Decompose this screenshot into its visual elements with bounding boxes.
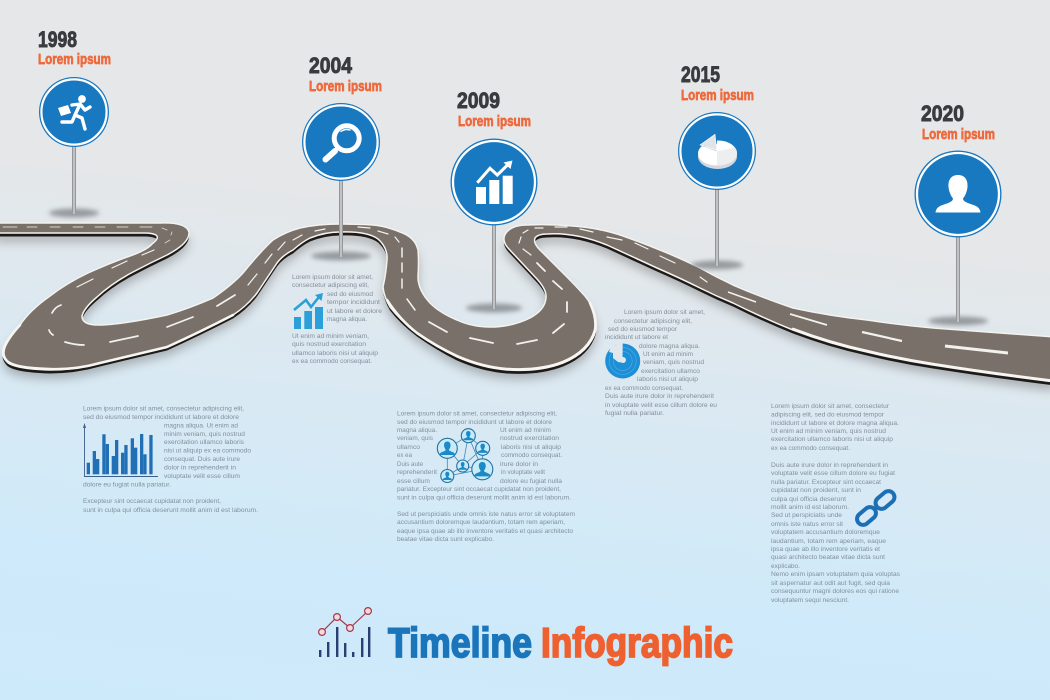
text block 2020: explicabo. xyxy=(771,563,800,570)
text block left: Lorem ipsum dolor sit amet, consectetur adipiscing elit, xyxy=(83,406,244,412)
year label 2004: 2004 xyxy=(309,53,353,78)
icon: growth chart xyxy=(294,293,323,329)
text block 2020: laudantium, totam rem aperiam, eaque xyxy=(771,538,886,545)
text block 2015 xyxy=(605,309,717,417)
milestone 2009 xyxy=(450,88,538,312)
text block left xyxy=(83,406,258,514)
sign post 2009 xyxy=(450,138,538,312)
text block left: voluptate velit esse cillum xyxy=(164,473,241,480)
year label 2020: 2020 xyxy=(921,101,964,126)
text block centre: commodo consequat. xyxy=(501,452,562,459)
icon: 3D pie xyxy=(698,134,737,169)
text block 2020: adipiscing elit, sed do eiusmod tempor xyxy=(771,412,885,418)
text block centre: sed do eiusmod tempor incididunt ut labore et dolore xyxy=(397,419,552,426)
text block left: minim veniam, quis nostrud xyxy=(164,431,245,438)
text block left: Excepteur sint occaecat cupidatat non proident, xyxy=(83,498,221,505)
text block 2004 xyxy=(292,274,382,365)
text block 2020: exercitation ullamco laboris nisi ut aliquip xyxy=(771,436,893,443)
text block 2020: Sed ut perspiciatis unde xyxy=(771,512,842,519)
text block 2004: consectetur adipiscing elit, xyxy=(292,282,369,289)
sign post 2015 xyxy=(678,112,756,270)
text block 2004: ex ea commodo consequat. xyxy=(292,358,372,365)
text block centre xyxy=(397,410,576,543)
text block centre: Sed ut perspiciatis unde omnis iste natus error sit voluptatem xyxy=(397,511,576,518)
text block 2015: Lorem ipsum dolor sit amet, xyxy=(624,309,705,316)
text block left: dolore eu fugiat nulla pariatur. xyxy=(83,482,171,489)
text block 2015: veniam, quis nostrud xyxy=(643,359,704,366)
text block 2004: Ut enim ad minim veniam, xyxy=(292,333,369,340)
year label 1998: 1998 xyxy=(38,27,77,52)
text block 2015: Ut enim ad minim xyxy=(643,351,693,358)
icon: runner xyxy=(58,95,90,129)
text block centre: Duis aute xyxy=(397,461,423,468)
text block 2020: ex ea commodo consequat. xyxy=(771,445,850,452)
text block centre: eaque ipsa quae ab illo inventore veritatis et quasi architecto xyxy=(397,528,573,535)
text block centre: pariatur. Excepteur sint occaecat cupidatat non proident, xyxy=(397,486,561,493)
text block 2020: mollit anim id est laborum. xyxy=(771,504,849,511)
text block 2015: ex ea commodo consequat. xyxy=(605,385,683,392)
text block 2004: sed do eiusmod xyxy=(327,291,373,298)
text block left: exercitation ullamco laboris xyxy=(164,439,245,446)
text block 2020 xyxy=(771,403,901,604)
subtitle 2009: Lorem ipsum xyxy=(458,114,531,130)
text block 2020: ipsa quae ab illo inventore veritatis et xyxy=(771,546,880,553)
text block 2020: Duis aute irure dolor in reprehenderit in xyxy=(771,462,888,469)
text block centre: ex ea xyxy=(397,452,412,459)
text block left: sed do eiusmod tempor incididunt ut labore et dolore xyxy=(83,414,239,421)
text block 2020: omnis iste natus error sit xyxy=(771,521,843,528)
text block left: consequat. Duis aute irure xyxy=(164,456,240,463)
text block 2004: ullamco laboris nisi ut aliquip xyxy=(292,350,378,357)
footer title xyxy=(319,608,733,666)
text block centre: Lorem ipsum dolor sit amet, consectetur adipiscing elit, xyxy=(397,410,557,418)
text block centre: Ut enim ad minim xyxy=(500,427,551,434)
subtitle 1998: Lorem ipsum xyxy=(38,52,111,68)
text block 2015: in voluptate velit esse cillum dolore eu xyxy=(605,402,717,409)
icon: magnifier xyxy=(326,126,359,160)
text block 2004: ut labore et dolore xyxy=(327,308,382,315)
year label 2009: 2009 xyxy=(457,88,500,113)
text block 2020: voluptatem accusantium doloremque xyxy=(771,529,880,536)
text block 2020: Nemo enim ipsam voluptatem quia voluptas xyxy=(771,571,901,578)
milestone 2004 xyxy=(302,53,382,260)
text block centre: reprehenderit xyxy=(397,469,437,476)
text block centre: irure dolor in xyxy=(500,461,538,468)
text block 2020: voluptate velit esse cillum dolore eu fugiat xyxy=(771,470,895,477)
text block centre: magna aliqua. xyxy=(397,427,437,434)
text block 2015: sed do eiusmod tempor xyxy=(608,326,678,333)
sign post 1998 xyxy=(39,77,109,218)
text block centre: veniam, quis xyxy=(397,435,434,442)
icon: rising bars xyxy=(476,160,513,204)
text block 2020: consequuntur magni dolores eos qui ratione xyxy=(771,588,899,595)
milestone 2015 xyxy=(678,62,756,270)
text block centre: accusantium doloremque laudantium, totam rem aperiam, xyxy=(397,519,565,526)
text block 2004: magna aliqua. xyxy=(327,316,367,323)
text block 2020: sit aspernatur aut odit aut fugit, sed quia xyxy=(771,580,890,587)
subtitle 2020: Lorem ipsum xyxy=(922,127,995,143)
text block 2020: quasi architecto beatae vitae dicta sunt xyxy=(771,554,885,561)
icon: chart logo xyxy=(319,608,371,657)
text block 2020: Lorem ipsum dolor sit amet, consectetur xyxy=(771,403,890,410)
text block left: sunt in culpa qui officia deserunt mollit anim id est laborum. xyxy=(83,507,258,514)
text block 2015: Duis aute irure dolor in reprehenderit xyxy=(605,393,714,400)
text block centre: laboris nisi ut aliquip xyxy=(501,444,561,451)
text block 2015: consectetur adipiscing elit, xyxy=(614,318,692,325)
icon: person xyxy=(936,175,980,212)
text block left: nisi ut aliquip ex ea commodo xyxy=(164,448,251,455)
text block centre: dolore eu fugiat nulla xyxy=(500,478,562,485)
text block centre: nostrud exercitation xyxy=(500,435,559,442)
subtitle 2004: Lorem ipsum xyxy=(309,79,382,95)
milestone 2020 xyxy=(914,101,1002,326)
text block 2020: nulla pariatur. Excepteur sint occaecat xyxy=(771,479,881,486)
text block centre: in voluptate velit xyxy=(501,469,545,476)
text block 2020: voluptatem sequi nesciunt. xyxy=(771,597,849,604)
year label 2015: 2015 xyxy=(681,62,720,87)
icon: people network xyxy=(437,429,493,482)
text block centre: sunt in culpa qui officia deserunt mollit anim id est laborum. xyxy=(397,494,571,502)
text block 2015: fugiat nulla pariatur. xyxy=(605,410,664,417)
text block left: magna aliqua. Ut enim ad xyxy=(164,422,238,429)
text block 2004: tempor incididunt xyxy=(327,299,380,306)
road xyxy=(0,223,1050,391)
title: Infographic: Infographic xyxy=(541,619,733,666)
text block 2004: Lorem ipsum dolor sit amet, xyxy=(292,274,373,281)
text block 2020: cupidatat non proident, sunt in xyxy=(771,487,861,494)
text block centre: beatae vitae dicta sunt explicabo. xyxy=(397,536,494,543)
text block centre: esse cillum xyxy=(397,478,430,485)
icon: segmented target xyxy=(605,342,640,378)
text block 2015: exercitation ullamco xyxy=(641,368,700,375)
sign post 2020 xyxy=(914,150,1002,326)
road centre dashes xyxy=(3,227,1008,353)
text block 2020: culpa qui officia deserunt xyxy=(771,496,846,503)
icon: chain link xyxy=(855,489,897,527)
sign post 2004 xyxy=(302,103,380,260)
text block 2020: Ut enim ad minim veniam, quis nostrud xyxy=(771,428,886,435)
text block 2015: laboris nisi ut aliquip xyxy=(637,376,698,383)
text block 2004: quis nostrud exercitation xyxy=(292,341,366,348)
icon: bar chart with axes xyxy=(83,423,158,476)
title: Timeline: Timeline xyxy=(388,619,532,666)
milestone 1998 xyxy=(38,27,111,218)
text block 2015: dolore magna aliqua. xyxy=(639,343,700,350)
text block 2015: incididunt ut labore et xyxy=(605,334,668,341)
subtitle 2015: Lorem ipsum xyxy=(681,88,754,104)
text block centre: ullamco xyxy=(397,444,420,451)
text block left: dolor in reprehenderit in xyxy=(164,464,236,472)
text block 2020: incididunt ut labore et dolore magna aliqua. xyxy=(771,420,899,427)
